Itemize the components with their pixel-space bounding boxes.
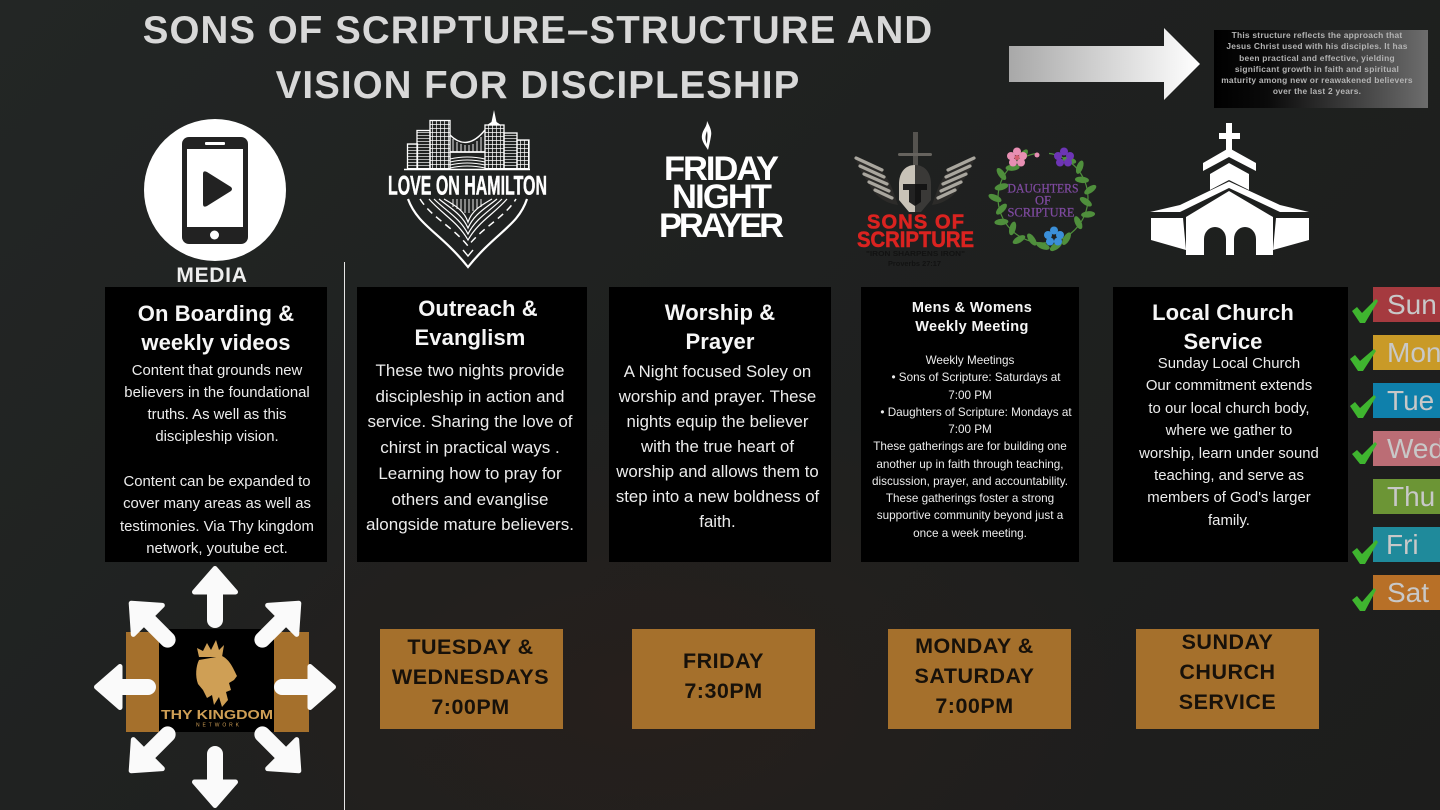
schedule: tuesday and wednesdays: WEDNESDAYS: [392, 665, 549, 689]
text: outreach body: alongside mature believers.: [366, 515, 574, 534]
heading: on boarding: On Boarding &: [138, 300, 294, 326]
text: outreach body: chirst in practical ways .: [380, 438, 560, 457]
text: local church body: to our local church body,: [1148, 401, 1310, 417]
logo: friday night prayer: NIGHT: [672, 178, 772, 216]
text: worship body: step into a new boldness of: [616, 486, 819, 506]
schedule: sunday: [1136, 629, 1319, 729]
heading: weekly meeting: Mens & Womens: [912, 300, 1032, 316]
logo: sons of scripture: "IRON SHARPENS IRON": [866, 251, 965, 258]
day tab: thursday: Thu: [1387, 481, 1435, 512]
heading: weekly meeting: Weekly Meeting: [915, 319, 1029, 335]
heading: local church: [1152, 300, 1294, 354]
schedule: friday: [632, 629, 815, 729]
text: local church body: where we gather to: [1166, 423, 1292, 439]
note: structure explanation: Jesus Christ used with his disciples. It has: [1226, 41, 1408, 51]
text: on boarding body: Content can be expanded to: [123, 474, 311, 490]
schedule: tuesday and wednesdays: [380, 629, 563, 729]
arrow: pointing to note: [1009, 28, 1200, 100]
logo: daughters of scripture wreath: DAUGHTERS: [1008, 182, 1079, 196]
day tab: thursday: [1373, 479, 1440, 514]
text: outreach body: [366, 361, 574, 534]
text: on boarding body: discipleship vision.: [155, 429, 279, 445]
text: worship body: worship and prayer. These: [619, 386, 816, 406]
text: weekly meeting body: [872, 354, 1072, 540]
text: on boarding body: believers in the foundational: [124, 385, 310, 401]
logo: daughters of scripture wreath: SCRIPTURE: [1008, 206, 1075, 220]
schedule: tuesday and wednesdays: TUESDAY &: [407, 635, 534, 659]
text: on boarding body: Content that grounds new: [132, 362, 302, 378]
logo: sons of scripture: SONS OF: [867, 212, 964, 234]
title: [143, 9, 933, 107]
day tab: tuesday: Tue: [1387, 385, 1434, 416]
text: local church body: Our commitment extends: [1146, 378, 1312, 394]
schedule: monday and saturday: SATURDAY: [915, 664, 1034, 688]
panel: worship: [609, 287, 831, 562]
logo: sons of scripture: Proverbs 27:17: [888, 261, 941, 268]
heading: on boarding: weekly videos: [141, 330, 291, 354]
schedule: tuesday and wednesdays: 7:00PM: [431, 695, 510, 719]
schedule: friday: FRIDAY: [683, 649, 764, 673]
day tab: saturday: [1373, 575, 1440, 610]
icon: church: [1150, 123, 1309, 255]
note: structure explanation: maturity among new or reawakened believers: [1221, 75, 1413, 85]
icons: green check marks: [1350, 299, 1378, 611]
vertical divider: [344, 262, 345, 810]
text: local church body: teaching, and serve as: [1154, 468, 1304, 484]
day tab: friday: Fri: [1386, 529, 1419, 560]
graphic: thy kingdom network with arrows: [94, 566, 336, 808]
text: weekly meeting body: Weekly Meetings: [926, 354, 1014, 367]
title: VISION FOR DISCIPLESHIP: [276, 64, 800, 107]
heading: local church: Local Church: [1152, 300, 1294, 324]
heading: worship: Worship &: [665, 300, 775, 325]
logo: love on hamilton: [388, 110, 547, 269]
logo: daughters of scripture wreath: [988, 148, 1096, 252]
schedule: friday: 7:30PM: [684, 679, 763, 703]
schedule: sunday: SERVICE: [1179, 690, 1276, 714]
text: weekly meeting body: • Daughters of Scripture: Mondays at: [880, 406, 1072, 419]
panel: local church: [1113, 287, 1348, 562]
text: weekly meeting body: 7:00 PM: [948, 388, 992, 402]
text: weekly meeting body: 7:00 PM: [948, 423, 992, 436]
text: on boarding body: network, youtube ect.: [146, 541, 288, 557]
heading: outreach: [415, 296, 538, 350]
schedule: monday and saturday: 7:00PM: [935, 694, 1014, 718]
text: outreach body: others and evanglise: [392, 490, 548, 509]
title: SONS OF SCRIPTURE–STRUCTURE AND: [143, 9, 933, 52]
text: local church body: worship, learn under sound: [1139, 446, 1319, 462]
text: worship body: [616, 362, 820, 530]
heading: local church: Service: [1184, 328, 1262, 354]
panel: weekly meeting: [861, 287, 1079, 562]
text: weekly meeting body: These gatherings foster a strong: [886, 492, 1054, 505]
text: on boarding body: truths. As well as this: [147, 407, 287, 423]
panel: on boarding: [105, 287, 327, 562]
heading: worship: [664, 300, 775, 354]
text: weekly meeting body: supportive community beyond just a: [877, 509, 1063, 522]
note: structure explanation: This structure reflects the approach that: [1232, 30, 1402, 40]
heading: worship: Prayer: [685, 329, 755, 354]
text: outreach body: These two nights provide: [376, 361, 564, 380]
text: outreach body: Learning how to pray for: [378, 464, 562, 483]
day tab: tuesday: [1373, 383, 1440, 418]
label: media: MEDIA: [176, 264, 248, 287]
schedule: monday and saturday: MONDAY &: [915, 634, 1034, 658]
text: weekly meeting body: discussion, prayer, and accountability.: [872, 475, 1068, 488]
logo: friday night prayer: FRIDAY: [664, 150, 779, 188]
heading: on boarding: [138, 300, 294, 354]
text: weekly meeting body: These gatherings are for building one: [873, 440, 1067, 453]
text: outreach body: service. Sharing the love of: [367, 412, 573, 431]
text: local church body: [1139, 356, 1319, 529]
note: structure explanation: over the last 2 years.: [1273, 86, 1361, 96]
panel: outreach: [357, 287, 587, 562]
text: worship body: A Night focused Soley on: [624, 362, 811, 380]
heading: weekly meeting: [912, 300, 1032, 335]
logo: friday night prayer: [659, 121, 784, 245]
text: outreach body: discipleship in action and: [375, 387, 564, 406]
text: worship body: faith.: [699, 512, 736, 530]
text: weekly meeting body: once a week meeting.: [913, 526, 1027, 540]
schedule: monday and saturday: [888, 629, 1071, 729]
schedule: sunday: CHURCH: [1179, 660, 1276, 684]
day tab: friday: [1373, 527, 1440, 562]
text: weekly meeting body: • Sons of Scripture: Saturdays at: [891, 371, 1061, 384]
logo: sons of scripture: [854, 132, 976, 268]
day tab: sunday: Sun: [1387, 289, 1437, 320]
note: structure explanation: [1214, 30, 1428, 108]
text: on boarding body: testimonies. Via Thy kingdom: [120, 519, 314, 535]
heading: outreach: Outreach &: [418, 296, 538, 320]
logo: friday night prayer: PRAYER: [659, 207, 784, 245]
day tab: saturday: Sat: [1387, 577, 1429, 608]
text: local church body: family.: [1208, 513, 1250, 529]
text: worship body: worship and allows them to: [616, 462, 819, 480]
graphic: thy kingdom network with arrows: THY KINGDOM: [161, 708, 273, 722]
text: worship body: with the true heart of: [641, 436, 794, 456]
day tab: monday: Mon: [1387, 337, 1440, 368]
icon: media phone with play button: [144, 119, 286, 261]
heading: outreach: Evanglism: [415, 324, 525, 350]
graphic: thy kingdom network with arrows: NETWORK: [196, 722, 240, 728]
note: structure explanation: significant growth in faith and spiritual: [1235, 64, 1399, 74]
schedule: sunday: SUNDAY: [1182, 630, 1273, 654]
text: weekly meeting body: another up in faith through teaching,: [876, 458, 1064, 470]
text: local church body: Sunday Local Church: [1158, 356, 1300, 372]
text: worship body: nights equip the believer: [627, 412, 808, 430]
logo: daughters of scripture wreath: OF: [1035, 194, 1051, 208]
text: on boarding body: cover many areas as well as: [123, 496, 311, 512]
text: on boarding body: [120, 362, 314, 557]
note: structure explanation: been practical and effective, yielding: [1239, 53, 1395, 63]
text: local church body: members of God's larger: [1147, 490, 1311, 506]
day tab: sunday: [1373, 287, 1440, 322]
